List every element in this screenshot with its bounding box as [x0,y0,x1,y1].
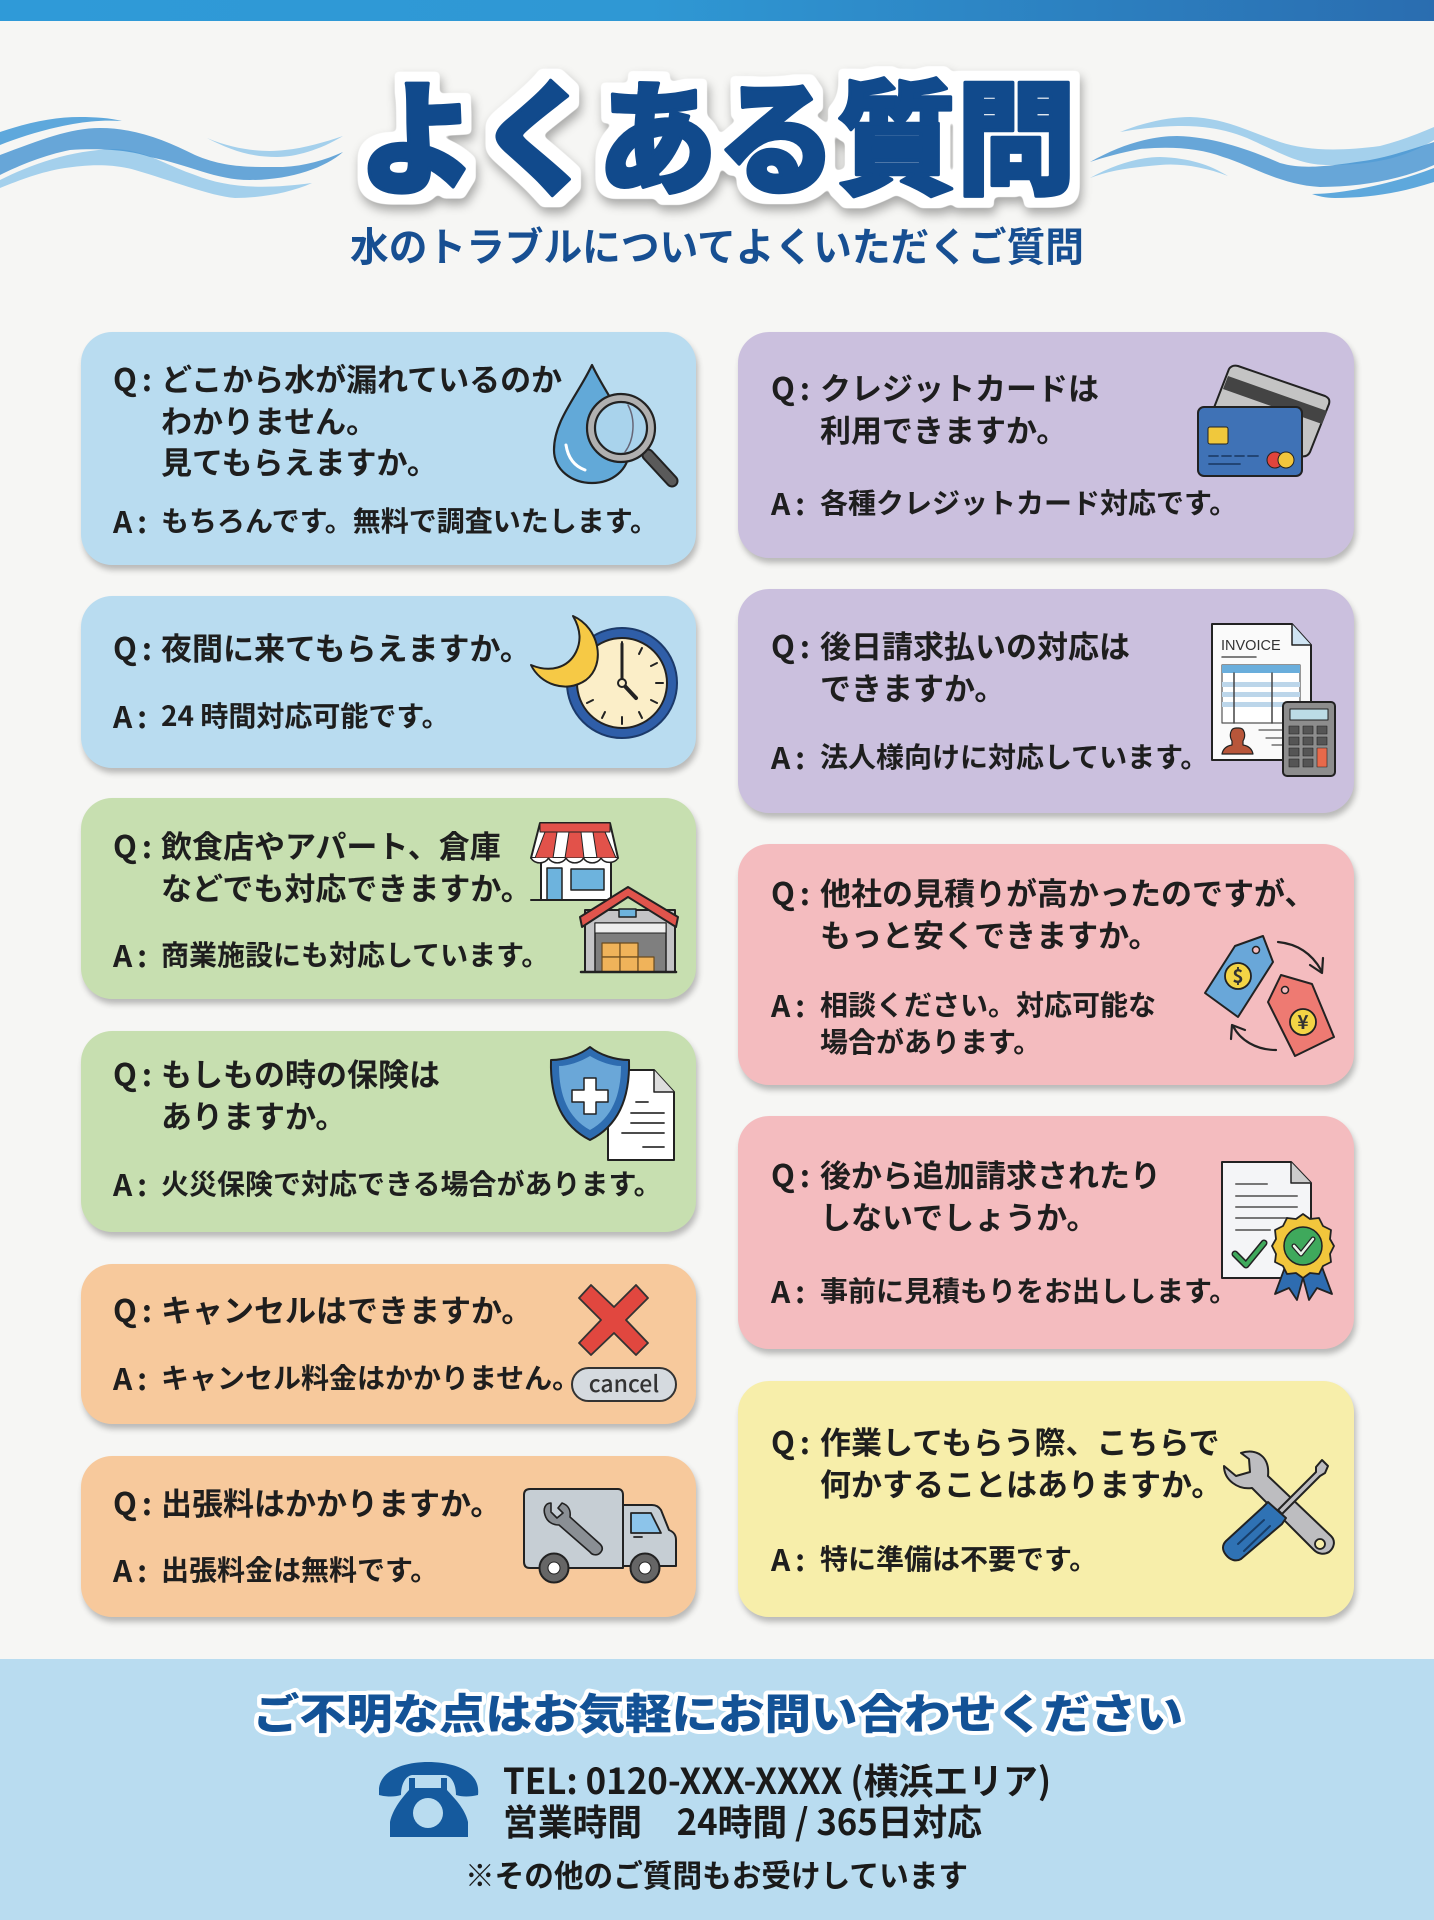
question text: 作業してもらう際、こちらで [820,1418,1220,1463]
icon: red cross [578,1284,649,1356]
icon: repair truck [523,1488,677,1584]
question text: しないでしょうか。 [820,1192,1097,1238]
answer text: 場合があります。 [820,1021,1041,1061]
panel: cancel question [81,1264,696,1424]
question text: Q: [771,869,815,914]
panel: night visit question [81,596,696,768]
icon: credit cards [1197,364,1330,477]
answer text: 各種クレジットカード対応です。 [820,482,1237,522]
answer text: 事前に見積もりをお出しします。 [820,1270,1237,1310]
icon: invoice and calculator [1211,623,1336,777]
answer text: 商業施設にも対応しています。 [161,934,549,974]
subtitle: 水のトラブルについてよくいただくご質問 [350,215,1084,273]
question text [113,1050,440,1136]
question text [771,869,1315,956]
question text: Q: [113,355,157,400]
icon: invoice and calculator: INVOICE [1221,638,1281,654]
icon: price tags with arrows [1204,935,1335,1057]
footer panel [0,1659,1434,1920]
answer text: A: [113,693,152,737]
icon: water drop with magnifier [552,364,678,488]
question text: わかりません。 [161,396,377,442]
answer text: もちろんです。無料で調査いたします。 [161,500,658,540]
question text: Q: [771,1151,815,1196]
answer text: A: [771,982,810,1026]
panel: insurance question [81,1031,696,1232]
panel: leak question [81,332,696,565]
panel: travel fee question [81,1456,696,1617]
answer text: A: [771,1268,810,1312]
footer heading: ご不明な点はお気軽にお問い合わせください [253,1681,1183,1742]
question text: 何かすることはありますか。 [820,1460,1222,1504]
answer text: 24 時間対応可能です。 [161,695,450,735]
question text: Q: [771,1418,815,1463]
cancel button: cancel [589,1365,659,1399]
answer text: キャンセル料金はかかりません。 [161,1357,580,1397]
icon: price tags with arrows: $ [1232,962,1244,989]
answer text: A: [113,498,152,542]
question text: ありますか。 [161,1092,346,1136]
question text: Q: [113,822,157,867]
question text: Q: [113,1286,157,1331]
answer text [770,982,1156,1061]
question text: 見てもらえますか。 [161,438,438,483]
icon: wrench and screwdriver [1222,1450,1335,1562]
question text [771,364,1099,450]
answer text: A: [771,480,810,524]
question text [771,622,1130,708]
answer text: A: [113,1161,152,1205]
answer text: 出張料金は無料です。 [161,1549,438,1589]
question text: Q: [113,1479,157,1524]
panel: preparation question [738,1381,1354,1617]
answer text: A: [113,1547,152,1591]
icon: shop and warehouse [530,822,679,974]
question text [113,355,562,483]
question text: Q: [113,624,157,669]
panel: credit card question [738,332,1354,558]
answer text: A: [113,1355,152,1399]
answer text: 法人様向けに対応しています。 [820,736,1208,776]
answer text: 特に準備は不要です。 [820,1538,1097,1578]
panel: commercial facility question [81,798,696,999]
question text [113,822,532,908]
question text: もっと安くできますか。 [820,910,1159,956]
question text: もしもの時の保険は [161,1050,440,1095]
panel: additional charge question [738,1116,1354,1349]
question text [771,1151,1161,1238]
answer text: A: [113,932,152,976]
question text: などでも対応できますか。 [161,864,532,908]
question text: クレジットカードは [820,364,1099,409]
question text: 他社の見積りが高かったのですが、 [820,869,1315,914]
panel: deferred payment question [738,589,1354,813]
question text: 利用できますか。 [820,406,1067,450]
icon: moon and clock [530,615,678,739]
question text: 夜間に来てもらえますか。 [161,624,531,669]
question text: 後から追加請求されたり [820,1151,1161,1196]
question text: 飲食店やアパート、倉庫 [161,822,501,867]
question text [771,1418,1222,1504]
question text: できますか。 [820,664,1005,708]
icon: certified document with medal [1221,1161,1335,1301]
question text: Q: [771,622,815,667]
question text: 出張料はかかりますか。 [161,1479,501,1524]
answer text: 相談ください。対応可能な [820,984,1156,1024]
wave decoration right [1090,117,1434,198]
icon: telephone [379,1762,478,1837]
answer text: A: [771,1536,810,1580]
question text: どこから水が漏れているのか [161,355,562,400]
question text: キャンセルはできますか。 [161,1286,532,1331]
icon: shield and document [550,1046,675,1161]
cancel button [571,1365,677,1402]
answer text: A: [771,734,810,778]
question text: Q: [771,364,815,409]
question text: 後日請求払いの対応は [820,622,1130,667]
panel: competitor quote question [738,844,1354,1085]
icon: price tags with arrows: ¥ [1297,1008,1309,1035]
wave decoration left [0,117,343,198]
question text: Q: [113,1050,157,1095]
top bar [0,0,1434,21]
answer text: 火災保険で対応できる場合があります。 [161,1163,662,1203]
